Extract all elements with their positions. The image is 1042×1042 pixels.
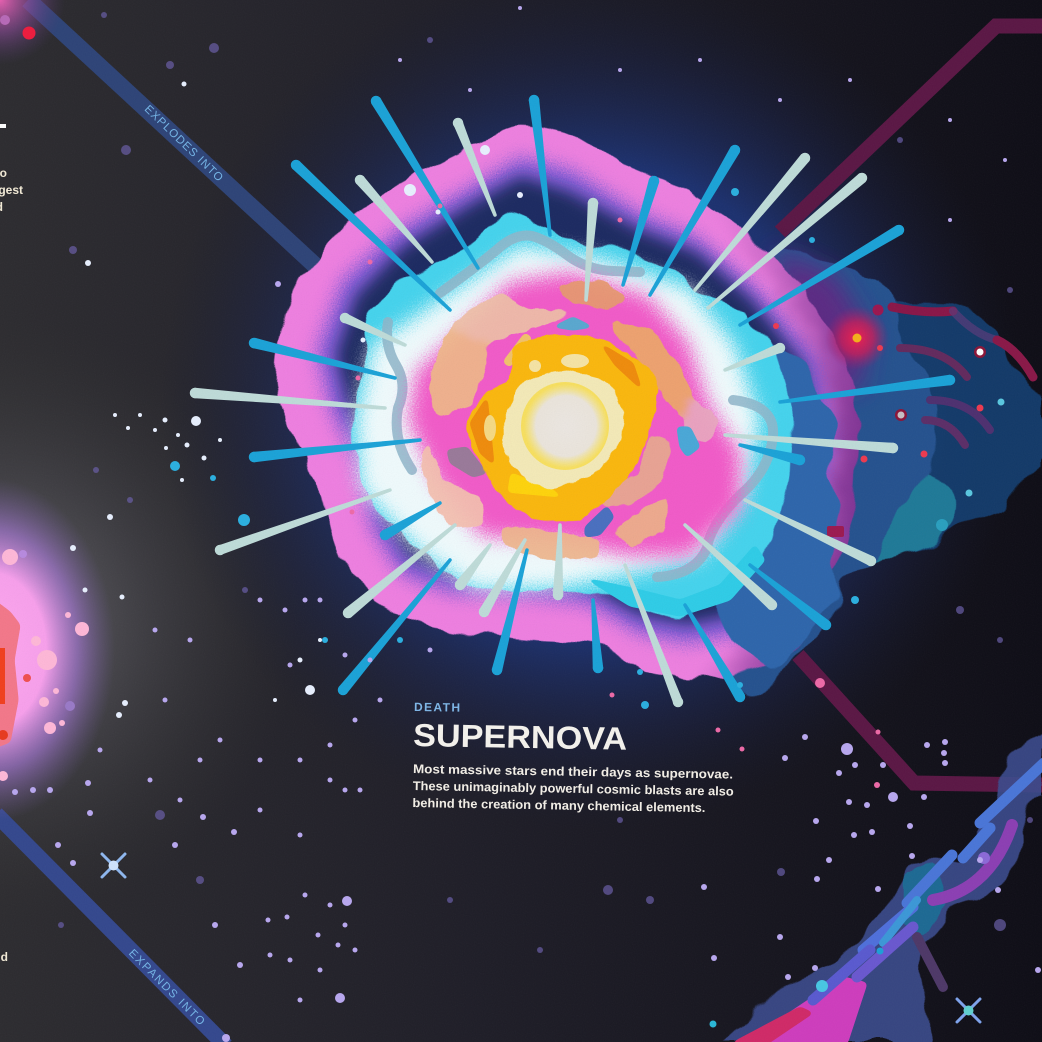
- pale spikes: [192, 120, 896, 706]
- magenta connector lines: [780, 26, 1042, 785]
- red wisps: [892, 307, 1033, 445]
- outer pink shock ring: [275, 124, 858, 678]
- right cloud: [715, 245, 1042, 700]
- yellow core: [467, 337, 656, 520]
- text block: supernova: [412, 700, 735, 816]
- left glowing star fragment: [0, 478, 115, 822]
- small coloured fragments: [447, 317, 700, 537]
- cropped text fragment upper left: [0, 124, 23, 214]
- cyan envelope: [350, 212, 792, 620]
- stage label: DEATH: [414, 700, 460, 715]
- cyan lower sweep: [585, 545, 765, 616]
- peach and orange clouds: [423, 283, 719, 559]
- blue spikes: [250, 96, 954, 700]
- connector band: expands into: [0, 814, 226, 1042]
- heading: SUPERNOVA: [413, 717, 627, 757]
- top-left star fragment: [0, 0, 70, 70]
- description: [412, 762, 735, 816]
- description: behind the creation of many chemical elements.: [412, 796, 706, 815]
- connector band: explodes into: EXPLODES INTO: [142, 103, 225, 184]
- blue-grey ribbons: [387, 235, 773, 577]
- red star in cloud: [773, 304, 1004, 537]
- connector band: explodes into: [28, 0, 320, 270]
- description: These unimaginably powerful cosmic blasts are also: [413, 779, 734, 799]
- pink layer: [408, 272, 740, 556]
- description: Most massive stars end their days as supernovae.: [413, 762, 733, 782]
- icon: cross star right: [957, 999, 980, 1022]
- icon: cross star left: [102, 854, 125, 877]
- white inner envelope: [356, 245, 760, 590]
- galaxy filament lower right: [705, 725, 1042, 1042]
- connector band: expands into: EXPANDS INTO: [126, 947, 207, 1028]
- purple haze around red star: [775, 250, 870, 390]
- supernova body: [350, 212, 792, 620]
- blue cloud beside body: [715, 340, 840, 670]
